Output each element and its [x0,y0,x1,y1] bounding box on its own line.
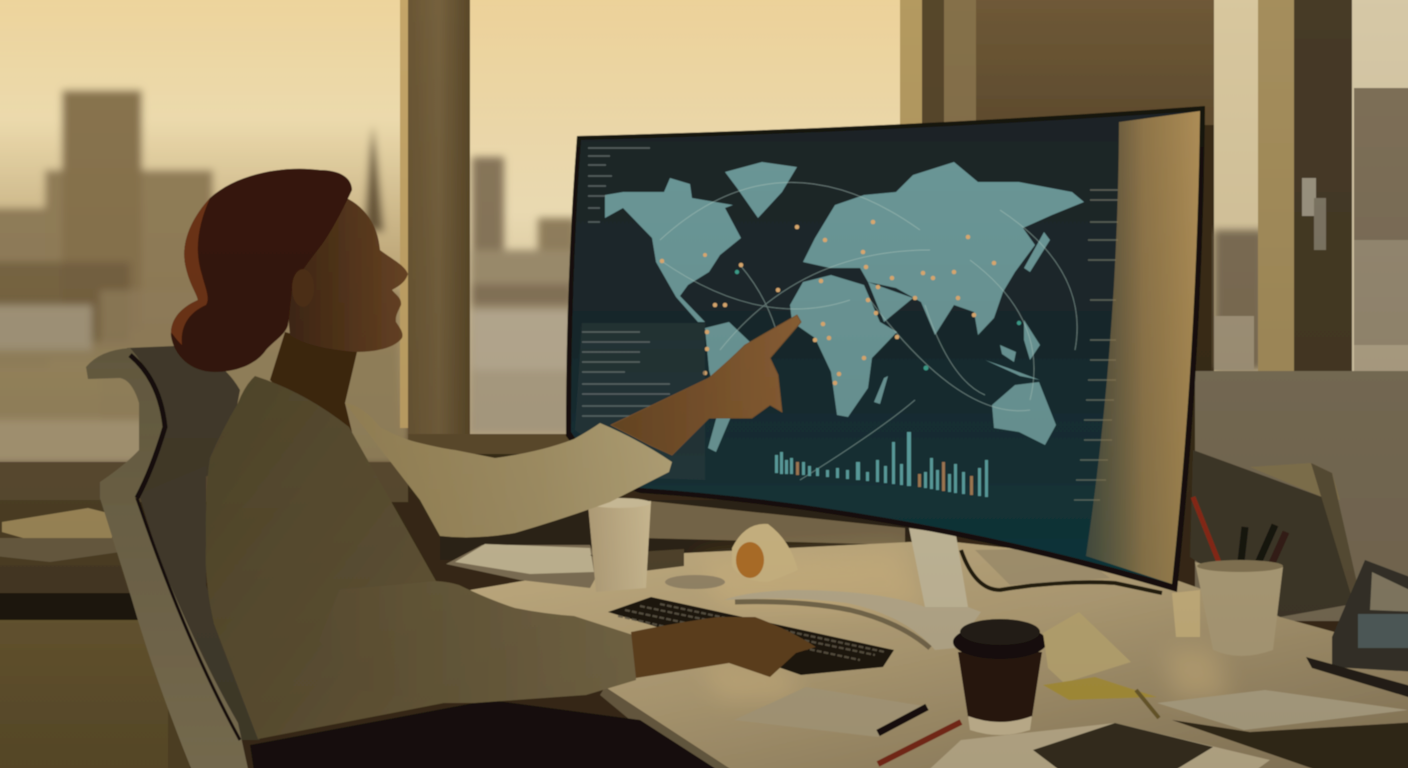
stack of papers [446,544,684,588]
Madagascar [874,376,888,404]
laptop behind pen holder [1190,450,1362,617]
hair rim light [171,198,210,345]
coffee cup [953,619,1047,735]
wall panel upper right [976,0,1216,125]
Australia [992,382,1056,445]
Greenland [725,162,797,218]
centre window with city skyline [470,0,902,434]
pointing hand and forearm [611,315,801,455]
window sill centre [408,434,580,454]
lower arm [320,581,636,703]
right window with tower [1214,0,1408,380]
torso [206,376,475,739]
city markers [660,220,996,385]
white cup behind [1172,590,1200,637]
Japan [1024,232,1050,272]
pen holder with pens [1193,497,1286,656]
chair mesh [139,466,260,740]
bar chart on screen [775,432,988,497]
documents on desk [734,687,1408,768]
lower hand [631,617,816,678]
office chair [86,346,260,768]
world map [605,162,1084,452]
monitor bezel [566,106,1205,592]
window mullion left [408,0,470,450]
South America [705,322,750,395]
partition right [1195,371,1408,621]
screen glare [1086,111,1200,584]
Southeast Asia islands [985,320,1040,380]
lower left data panel [575,323,705,480]
neck [270,332,357,432]
window mullion right with latch [1258,0,1352,378]
Arabia [868,282,913,322]
woman [171,169,816,768]
window frame bottom left [0,462,408,502]
monitor [566,106,1205,592]
crumpled wrapper [1043,612,1131,683]
keyboard [608,597,894,675]
left side panel lines [588,148,650,222]
yellow note [1043,677,1157,700]
back shelf [440,500,910,560]
route lines [660,182,1077,480]
left window with city skyline [0,0,410,465]
main desk surface [470,542,1408,768]
desk organizer right [1306,560,1408,700]
lap [250,700,730,768]
hair [171,169,352,372]
chair frame [86,348,250,768]
window mullion centre [900,0,976,140]
monitor stand and base [724,528,1162,650]
Africa [790,275,897,417]
pointing sleeve [345,403,672,537]
Europe and Asia [803,162,1084,335]
right side panel lines [1074,190,1118,500]
monitor screen [571,111,1200,584]
chair cushion [127,346,240,500]
crumpled paper ball [665,524,798,589]
left desk with books and cabinet [0,500,190,768]
paper cup on shelf [587,498,651,592]
face [285,195,408,352]
desk front edge [600,687,744,768]
North America [605,178,741,322]
ear [292,269,314,307]
desk light streaks [700,550,1230,700]
